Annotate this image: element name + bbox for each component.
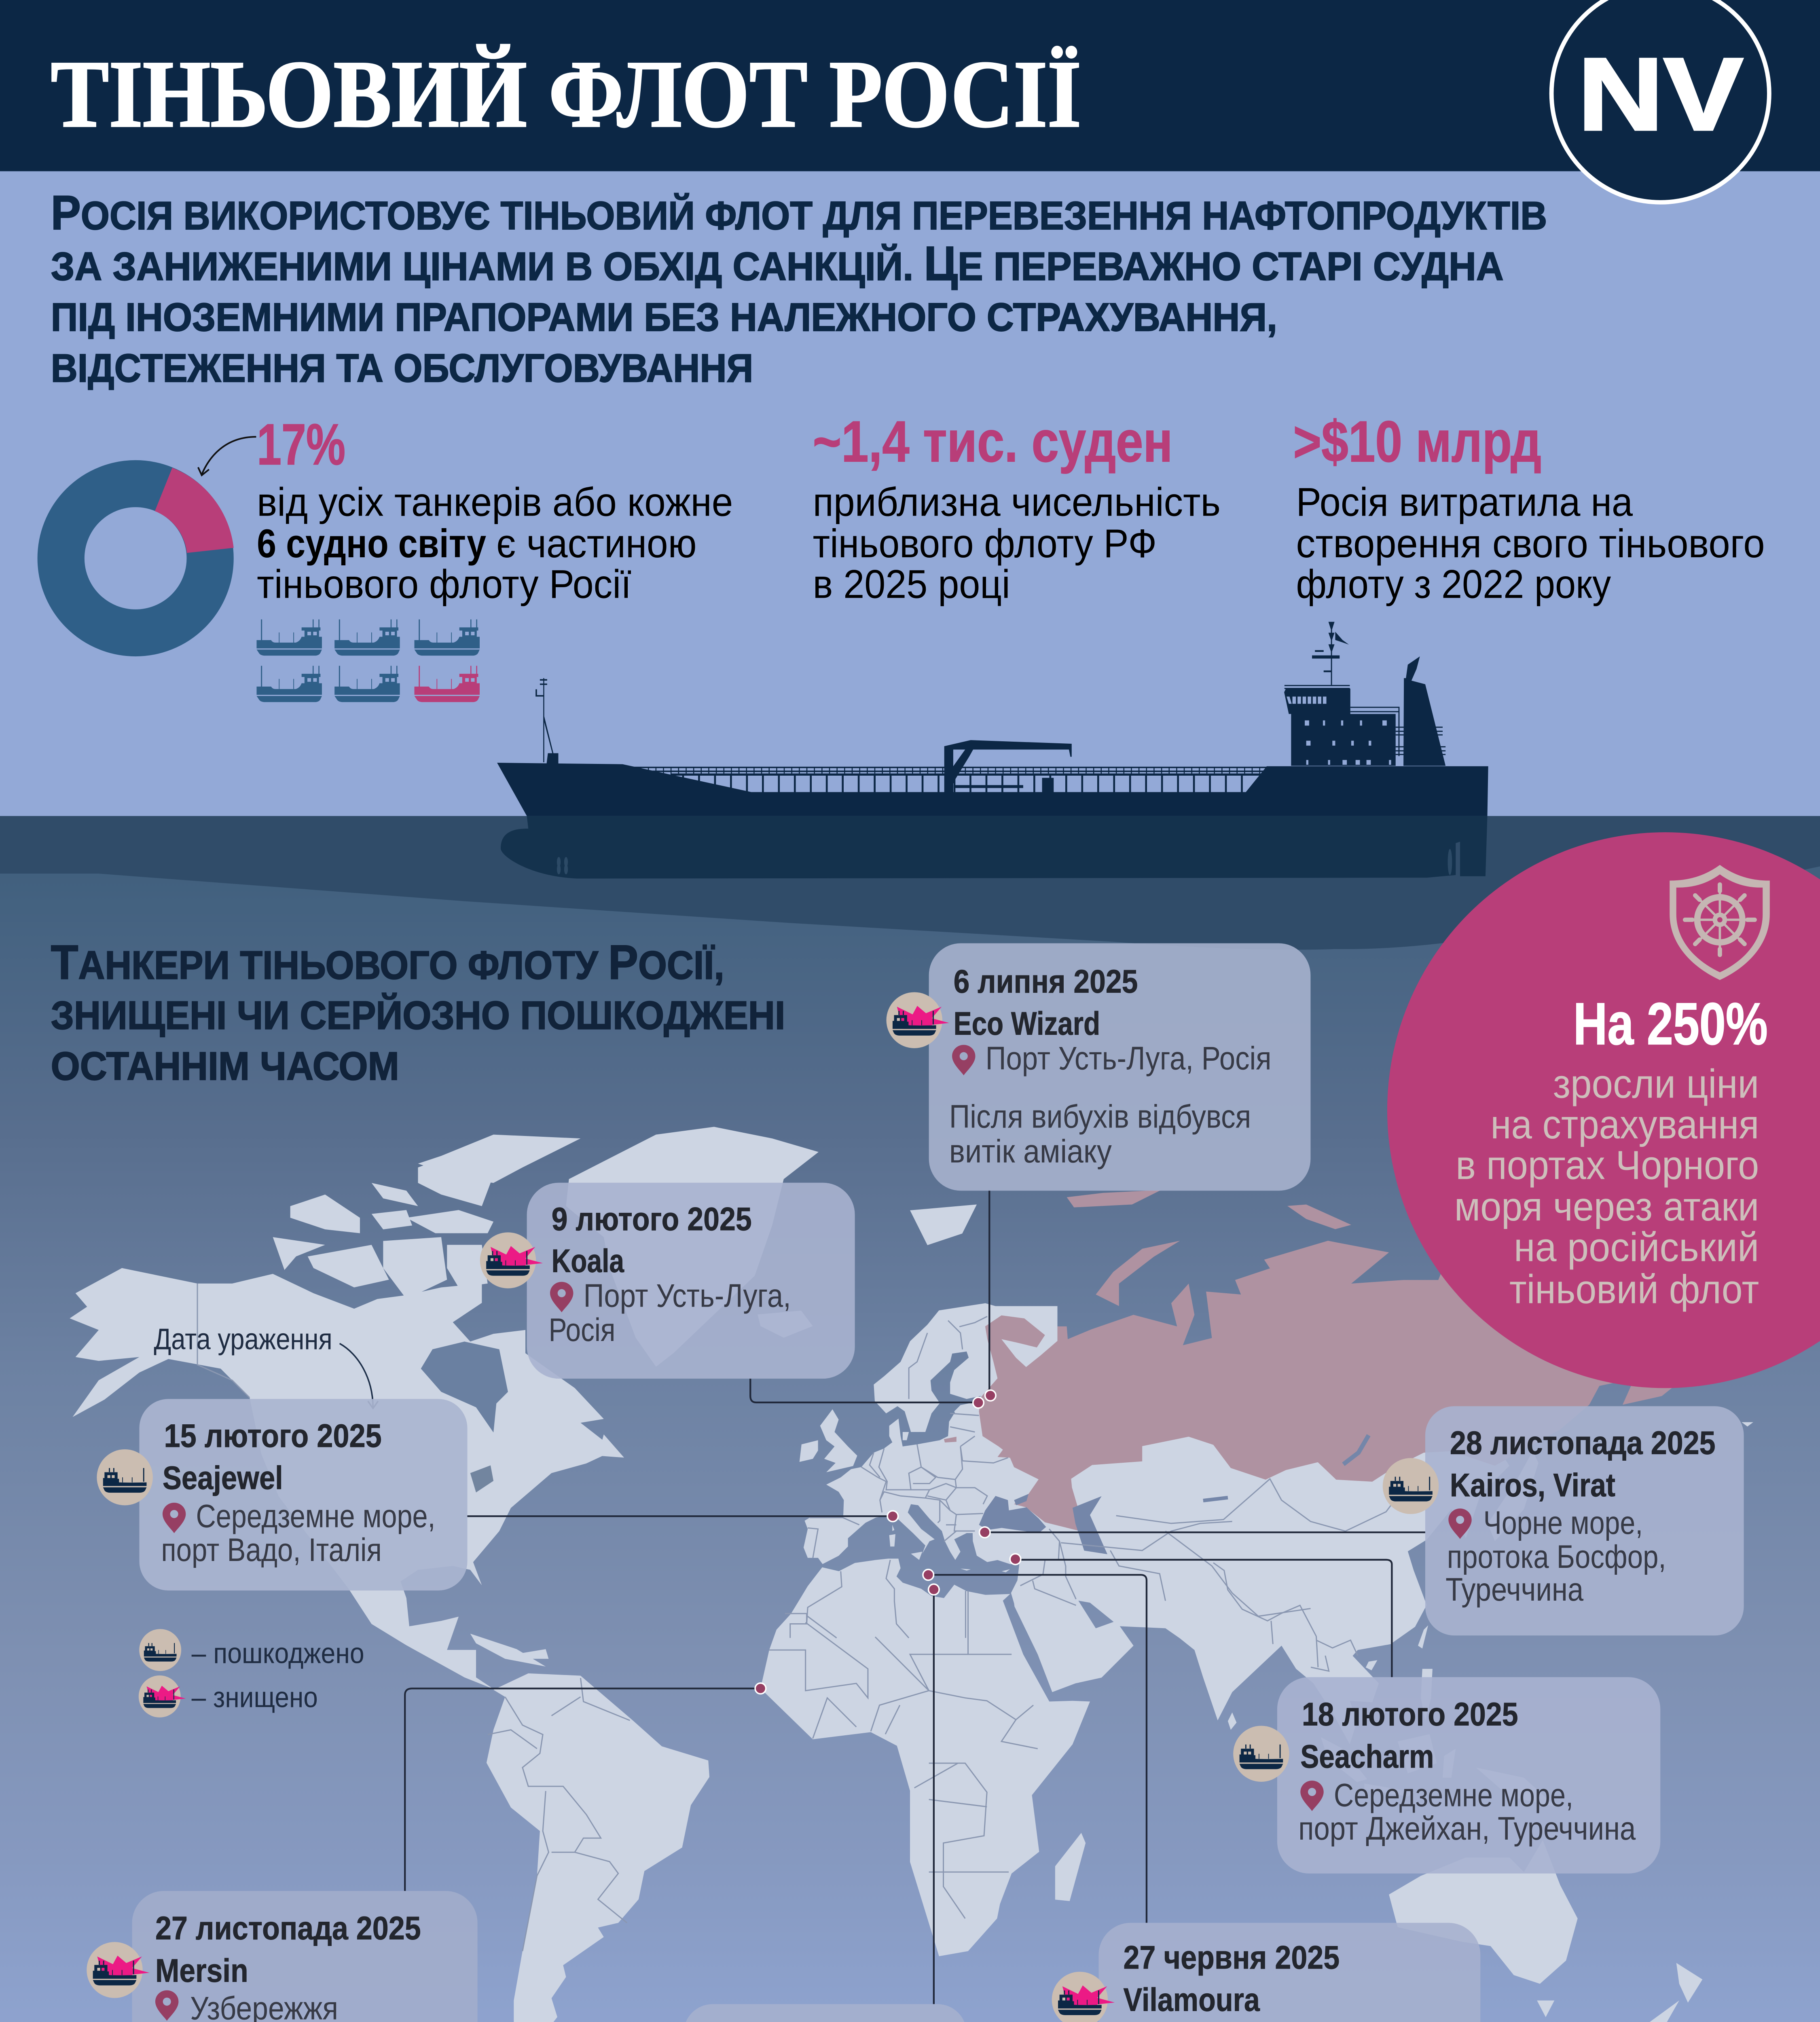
card: Eco Wizard: Eco Wizard <box>954 1006 1100 1042</box>
section heading: ОСТАННІМ ЧАСОМ <box>51 1044 399 1088</box>
logo: NV: NV <box>1578 36 1743 152</box>
stat: fleet size <box>813 409 1221 607</box>
stat: 17%: є частиною <box>496 521 696 566</box>
title: ТІНЬОВИЙ ФЛОТ РОСІЇ <box>51 41 1081 147</box>
card: Kairos, Virat: протока Босфор, <box>1447 1539 1666 1575</box>
stat: 17%: 17% <box>257 412 345 477</box>
card: Eco Wizard: Порт Усть-Луга, Росія <box>986 1041 1272 1077</box>
illustration: tanker underwater hull <box>501 816 1488 878</box>
country borders <box>197 1284 1421 1951</box>
card: Vilamoura: Vilamoura <box>1124 1982 1260 2018</box>
card: Seacharm: 18 лютого 2025 <box>1302 1696 1518 1733</box>
section heading <box>51 935 785 1088</box>
intro text <box>51 186 1547 390</box>
intro text: ЗА ЗАНИЖЕНИМИ ЦІНАМИ В ОБХІД САНКЦІЙ. ЦЕ ПЕРЕВАЖНО СТАРІ СУДНА <box>51 237 1504 291</box>
card: Koala: Koala <box>552 1243 624 1279</box>
legend <box>139 1629 364 1717</box>
inland waters <box>421 1341 1369 1554</box>
annotation: strike date: Дата ураження <box>154 1322 332 1356</box>
stat: spending <box>1293 409 1765 607</box>
card: Seajewel: порт Вадо, Італія <box>161 1532 382 1568</box>
card: Seacharm: порт Джейхан, Туреччина <box>1298 1810 1636 1847</box>
intro text: ВІДСТЕЖЕННЯ ТА ОБСЛУГОВУВАННЯ <box>51 346 753 390</box>
stat: 17%: від усіх танкерів або кожне <box>257 480 733 525</box>
card: Kairos, Virat: Туреччина <box>1445 1571 1583 1608</box>
card: Vilamoura: 27 червня 2025 <box>1124 1940 1340 1976</box>
card: Koala: 9 лютого 2025 <box>552 1201 752 1237</box>
Russia <box>944 1190 1820 1531</box>
card: Kairos, Virat: 28 листопада 2025 <box>1450 1425 1716 1462</box>
card: Koala <box>480 1183 855 1379</box>
card: Mersin <box>87 1891 478 2022</box>
donut chart: 17% <box>61 468 234 633</box>
legend: – пошкоджено <box>192 1637 364 1669</box>
stat: 17% <box>257 412 733 607</box>
icon: shield with ship wheel <box>1670 865 1770 980</box>
card: Seacharm: Середземне море, <box>1334 1777 1573 1813</box>
card: Eco Wizard: 6 липня 2025 <box>954 964 1138 1000</box>
stat: spending: >$10 млрд <box>1293 409 1541 474</box>
card: Kairos, Virat <box>1383 1406 1744 1635</box>
stat: fleet size: в 2025 році <box>813 562 1010 607</box>
card: Koala: Росія <box>548 1312 616 1348</box>
stat: 17%: 6 судно світу <box>257 521 486 566</box>
stat: fleet size: приблизна чисельність <box>813 480 1221 525</box>
stat: 17%: тіньового флоту Росії <box>257 562 631 607</box>
card: Koala: Порт Усть-Луга, <box>584 1277 791 1314</box>
card: Seajewel: 15 лютого 2025 <box>164 1418 382 1454</box>
card: Eco Wizard: Після вибухів відбувся <box>949 1098 1251 1135</box>
sea <box>0 816 1820 2022</box>
card: Grace Ferrum <box>638 2004 967 2022</box>
card: Vilamoura <box>1052 1923 1480 2022</box>
callout: insurance prices: тіньовий флот <box>1509 1267 1759 1312</box>
card: Seacharm <box>1233 1677 1660 1874</box>
callout: insurance prices: моря через атаки <box>1454 1184 1759 1229</box>
world map <box>70 1127 1820 2022</box>
card: Seajewel: Середземне море, <box>196 1498 436 1535</box>
stat: spending: Росія витратила на <box>1296 480 1633 525</box>
illustration: tanker silhouette <box>497 622 1488 816</box>
stat: spending: флоту з 2022 року <box>1296 562 1611 607</box>
callout: insurance prices: зросли ціни <box>1553 1062 1759 1107</box>
callout: insurance prices: в портах Чорного <box>1456 1143 1759 1188</box>
header bar <box>0 0 1820 171</box>
card: Seacharm: Seacharm <box>1300 1739 1434 1775</box>
location markers <box>755 1390 1021 1694</box>
stat: spending: створення свого тіньового <box>1296 521 1765 566</box>
section heading: ЗНИЩЕНІ ЧИ СЕРЙОЗНО ПОШКОДЖЕНІ <box>51 993 785 1037</box>
card: Kairos, Virat: Чорне море, <box>1483 1505 1643 1541</box>
intro text: РОСІЯ ВИКОРИСТОВУЄ ТІНЬОВИЙ ФЛОТ ДЛЯ ПЕРЕВЕЗЕННЯ НАФТОПРОДУКТІВ <box>51 186 1547 240</box>
stat: fleet size: ~1,4 тис. суден <box>813 409 1173 474</box>
intro text: ПІД ІНОЗЕМНИМИ ПРАПОРАМИ БЕЗ НАЛЕЖНОГО СТРАХУВАННЯ, <box>51 295 1277 339</box>
card: Seajewel: Seajewel <box>163 1460 283 1496</box>
card: Eco Wizard <box>887 943 1310 1191</box>
callout: insurance prices: На 250% <box>1573 991 1768 1057</box>
arrow: 17% to donut <box>198 437 256 475</box>
legend: – знищено <box>192 1681 318 1714</box>
icon row: six ships, one in six <box>256 620 480 702</box>
callout: insurance prices: на страхування <box>1490 1102 1759 1147</box>
annotation: strike date <box>154 1322 378 1409</box>
logo: NV <box>1551 0 1769 202</box>
card: Mersin: Mersin <box>155 1952 248 1989</box>
card: Eco Wizard: витік аміаку <box>949 1133 1112 1170</box>
card: Seajewel <box>97 1399 468 1591</box>
connector lines <box>405 1190 1425 2004</box>
section heading: ТАНКЕРИ ТІНЬОВОГО ФЛОТУ РОСІЇ, <box>51 935 724 989</box>
stat: fleet size: тіньового флоту РФ <box>813 521 1157 566</box>
callout: insurance prices <box>1387 832 1820 1388</box>
callout: insurance prices: на російський <box>1514 1225 1759 1270</box>
card: Kairos, Virat: Kairos, Virat <box>1450 1467 1615 1504</box>
card: Mersin: 27 листопада 2025 <box>155 1910 421 1947</box>
